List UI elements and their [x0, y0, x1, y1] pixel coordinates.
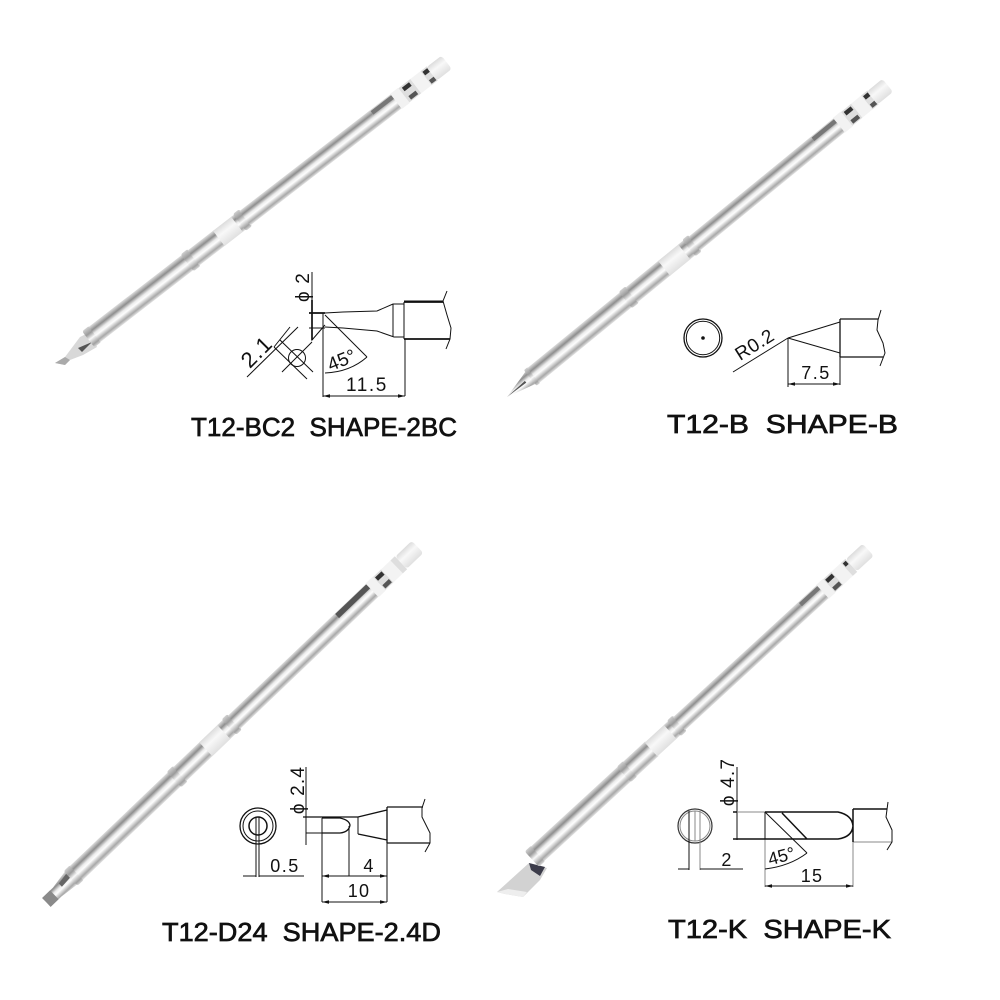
dimension: 7.5: 7.5 [801, 363, 831, 383]
dimension: 2: 2 [721, 850, 733, 870]
dimension: 45 degrees: 45° [766, 843, 797, 869]
dimension: 0.5: 0.5 [270, 856, 300, 876]
dimension: R0.2: R0.2 [732, 325, 779, 365]
label: T12-K SHAPE-K: T12-K SHAPE-K [668, 914, 892, 944]
dimension drawing: 2.4D [240, 766, 430, 902]
panel: T12-B [500, 77, 898, 439]
dimension: 4: 4 [363, 856, 375, 876]
soldering tip: D24 [39, 539, 425, 910]
dimension: phi 2.4: ϕ 2.4 [288, 766, 309, 814]
label: T12-D24 SHAPE-2.4D: T12-D24 SHAPE-2.4D [162, 917, 441, 947]
dimension: 45 degrees: 45° [325, 346, 359, 376]
dimension drawing: K [678, 758, 892, 887]
dimension: 15: 15 [801, 866, 823, 886]
panel: T12-K [497, 542, 892, 944]
soldering tip: BC2 [55, 54, 453, 365]
panel: T12-BC2 [55, 54, 457, 442]
dimension drawing: B [684, 310, 885, 387]
dimension: 11.5: 11.5 [346, 375, 388, 396]
soldering tip: B [500, 77, 894, 405]
dimension: 10: 10 [348, 881, 370, 901]
dimension: phi 2: ϕ 2 [293, 272, 314, 302]
dimension: phi 4.7: ϕ 4.7 [718, 758, 739, 806]
soldering tip: K [497, 542, 875, 897]
dimension: 2.1: 2.1 [236, 331, 278, 373]
label: T12-B SHAPE-B: T12-B SHAPE-B [667, 409, 898, 439]
label: T12-BC2 SHAPE-2BC: T12-BC2 SHAPE-2BC [191, 412, 457, 442]
panel: T12-D24 [39, 539, 441, 947]
dimension drawing: 2BC [236, 272, 451, 397]
